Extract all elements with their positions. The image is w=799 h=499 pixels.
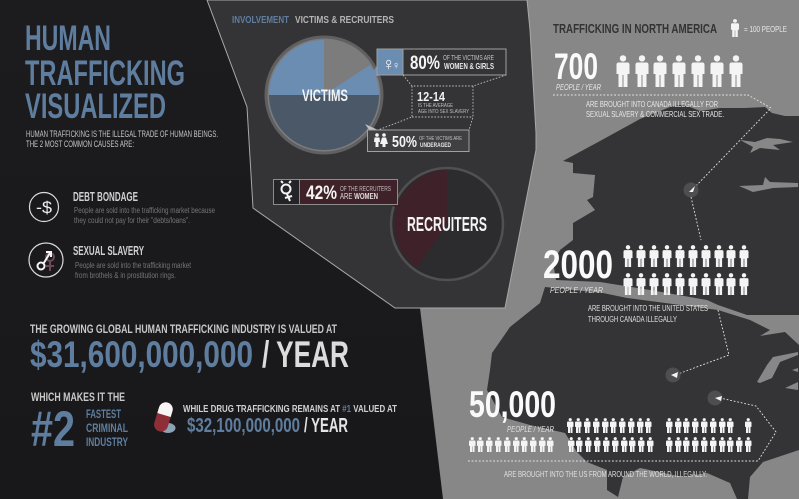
stat: number 2: FASTEST bbox=[86, 407, 121, 421]
callout: age 12-14: IS THE AVERAGE bbox=[418, 103, 453, 109]
cause: sexual slavery bbox=[29, 243, 192, 280]
cause: debt bondage: they could not pay for their "debts/loans". bbox=[74, 216, 190, 225]
stat: united states: ARE BROUGHT INTO THE UNITED STATES bbox=[588, 303, 708, 313]
intro text: THE 2 MOST COMMON CAUSES ARE: bbox=[26, 139, 134, 149]
heading: north america: TRAFFICKING IN NORTH AMERICA bbox=[553, 21, 717, 36]
callout: age 12-14 bbox=[417, 89, 469, 115]
title bbox=[25, 19, 185, 126]
stat: united states: 2000 bbox=[543, 243, 613, 287]
stat: global value: THE GROWING GLOBAL HUMAN TRAFFICKING INDUSTRY IS VALUED AT bbox=[30, 324, 337, 336]
pictogram: 700 bbox=[616, 55, 742, 87]
pictogram: 50000 bbox=[469, 418, 752, 452]
icon: children bbox=[374, 133, 388, 147]
callout: 80 percent: OF THE VICTIMS ARE bbox=[443, 55, 494, 62]
icon: debt bbox=[30, 192, 58, 222]
callout: 42 percent: 42% bbox=[306, 183, 337, 204]
map: hudson water bbox=[739, 177, 798, 192]
cause: debt bondage: People are sold into the trafficking market because bbox=[74, 206, 215, 215]
stat: world: PEOPLE / YEAR bbox=[507, 425, 554, 434]
cause: sexual slavery: People are sold into the trafficking market bbox=[75, 261, 192, 270]
cause: sexual slavery: SEXUAL SLAVERY bbox=[73, 244, 144, 258]
callout: 80 percent: 80% bbox=[410, 53, 440, 74]
dotted connector: age bbox=[378, 75, 506, 130]
callout: 42 percent: OF THE RECRUITERS bbox=[340, 186, 391, 193]
stat: world: ARE BROUGHT INTO THE US FROM AROUND THE WORLD, ILLEGALLY. bbox=[504, 469, 707, 479]
stat: united states: THROUGH CANADA ILLEGALLY bbox=[588, 314, 677, 324]
icon: female symbol bbox=[274, 180, 300, 204]
icon: women bbox=[377, 49, 403, 75]
stat: number 2: #2 bbox=[31, 401, 75, 457]
callout: 50 percent bbox=[365, 124, 469, 152]
title: TRAFFICKING bbox=[25, 54, 185, 93]
cause: debt bondage: DEBT BONDAGE bbox=[73, 190, 138, 204]
chart: victims pie: VICTIMS bbox=[302, 86, 348, 105]
stat: number 2: CRIMINAL bbox=[86, 421, 128, 435]
panel: involvement bbox=[207, 0, 536, 308]
stat: canada: SEXUAL SLAVERY & COMMERCIAL SEX TRADE. bbox=[586, 109, 724, 119]
stat: united states: PEOPLE / YEAR bbox=[550, 285, 603, 295]
callout: 50 percent: UNDERAGED bbox=[420, 142, 451, 149]
arrow: canada bbox=[553, 95, 771, 240]
stat: canada: PEOPLE / YEAR bbox=[556, 83, 601, 92]
title: VISUALIZED bbox=[25, 87, 166, 126]
map: us landmass bbox=[487, 287, 799, 499]
map: canada landmass bbox=[553, 105, 799, 315]
chart: recruiters pie: RECRUITERS bbox=[407, 214, 487, 236]
icon: debt: -$ bbox=[36, 198, 53, 217]
stat: canada bbox=[554, 46, 742, 119]
stat: drug trafficking: WHILE DRUG TRAFFICKING REMAINS AT #1 VALUED AT bbox=[183, 403, 397, 415]
callout: 42 percent bbox=[274, 180, 401, 210]
callout: age 12-14: 12-14 bbox=[417, 89, 446, 104]
icon: women: ♀ bbox=[382, 54, 396, 74]
heading: involvement bbox=[232, 14, 394, 26]
arrow: world bbox=[468, 390, 776, 461]
chart: recruiters pie bbox=[391, 168, 503, 280]
intro text bbox=[26, 129, 218, 149]
stat: united states bbox=[543, 243, 748, 324]
map: northern bay bbox=[740, 138, 793, 153]
icon: pill bbox=[152, 401, 176, 433]
icon: gender symbols bbox=[29, 243, 63, 277]
callout: 50 percent: 50% bbox=[392, 134, 417, 151]
arrow: united states bbox=[666, 310, 729, 382]
stat: global value: / YEAR bbox=[262, 334, 349, 375]
stat: number 2: INDUSTRY bbox=[86, 435, 128, 449]
title: HUMAN bbox=[25, 19, 111, 58]
callout: 42 percent: ARE WOMEN bbox=[340, 192, 378, 201]
chart: victims pie bbox=[266, 37, 382, 153]
stat: number 2: WHICH MAKES IT THE bbox=[31, 390, 125, 404]
stat: world bbox=[469, 384, 752, 479]
stat: global value: $31,600,000,000 bbox=[30, 334, 253, 375]
callout: 80 percent bbox=[370, 49, 506, 76]
stat: canada: ARE BROUGHT INTO CANADA ILLEGALLY FOR bbox=[586, 99, 718, 109]
heading: involvement: INVOLVEMENT bbox=[232, 14, 289, 26]
intro text: HUMAN TRAFFICKING IS THE ILLEGAL TRADE OF HUMAN BEINGS. bbox=[26, 129, 218, 139]
heading: involvement: VICTIMS & RECRUITERS bbox=[295, 14, 394, 26]
icon: women: ♀ bbox=[392, 60, 400, 72]
stat: canada: 700 bbox=[554, 46, 598, 87]
callout: 80 percent: WOMEN & GIRLS bbox=[444, 61, 494, 71]
legend: person icon bbox=[731, 19, 787, 37]
panel: north america map bbox=[420, 0, 799, 499]
map: great lakes bbox=[757, 352, 798, 390]
stat: drug trafficking bbox=[183, 403, 397, 437]
stat: drug trafficking: $32,100,000,000 bbox=[187, 415, 300, 437]
stat: drug trafficking: / YEAR bbox=[304, 415, 348, 437]
cause: debt bondage bbox=[30, 190, 215, 225]
callout: 50 percent: OF THE VICTIMS ARE bbox=[419, 136, 462, 142]
stat: world: 50,000 bbox=[469, 384, 556, 425]
stat: number 2 bbox=[31, 390, 128, 457]
cause: sexual slavery: from brothels & in prostitution rings. bbox=[75, 271, 176, 280]
callout: age 12-14: AGE INTO SEX SLAVERY bbox=[418, 109, 469, 115]
pictogram: 2000 bbox=[624, 245, 748, 295]
